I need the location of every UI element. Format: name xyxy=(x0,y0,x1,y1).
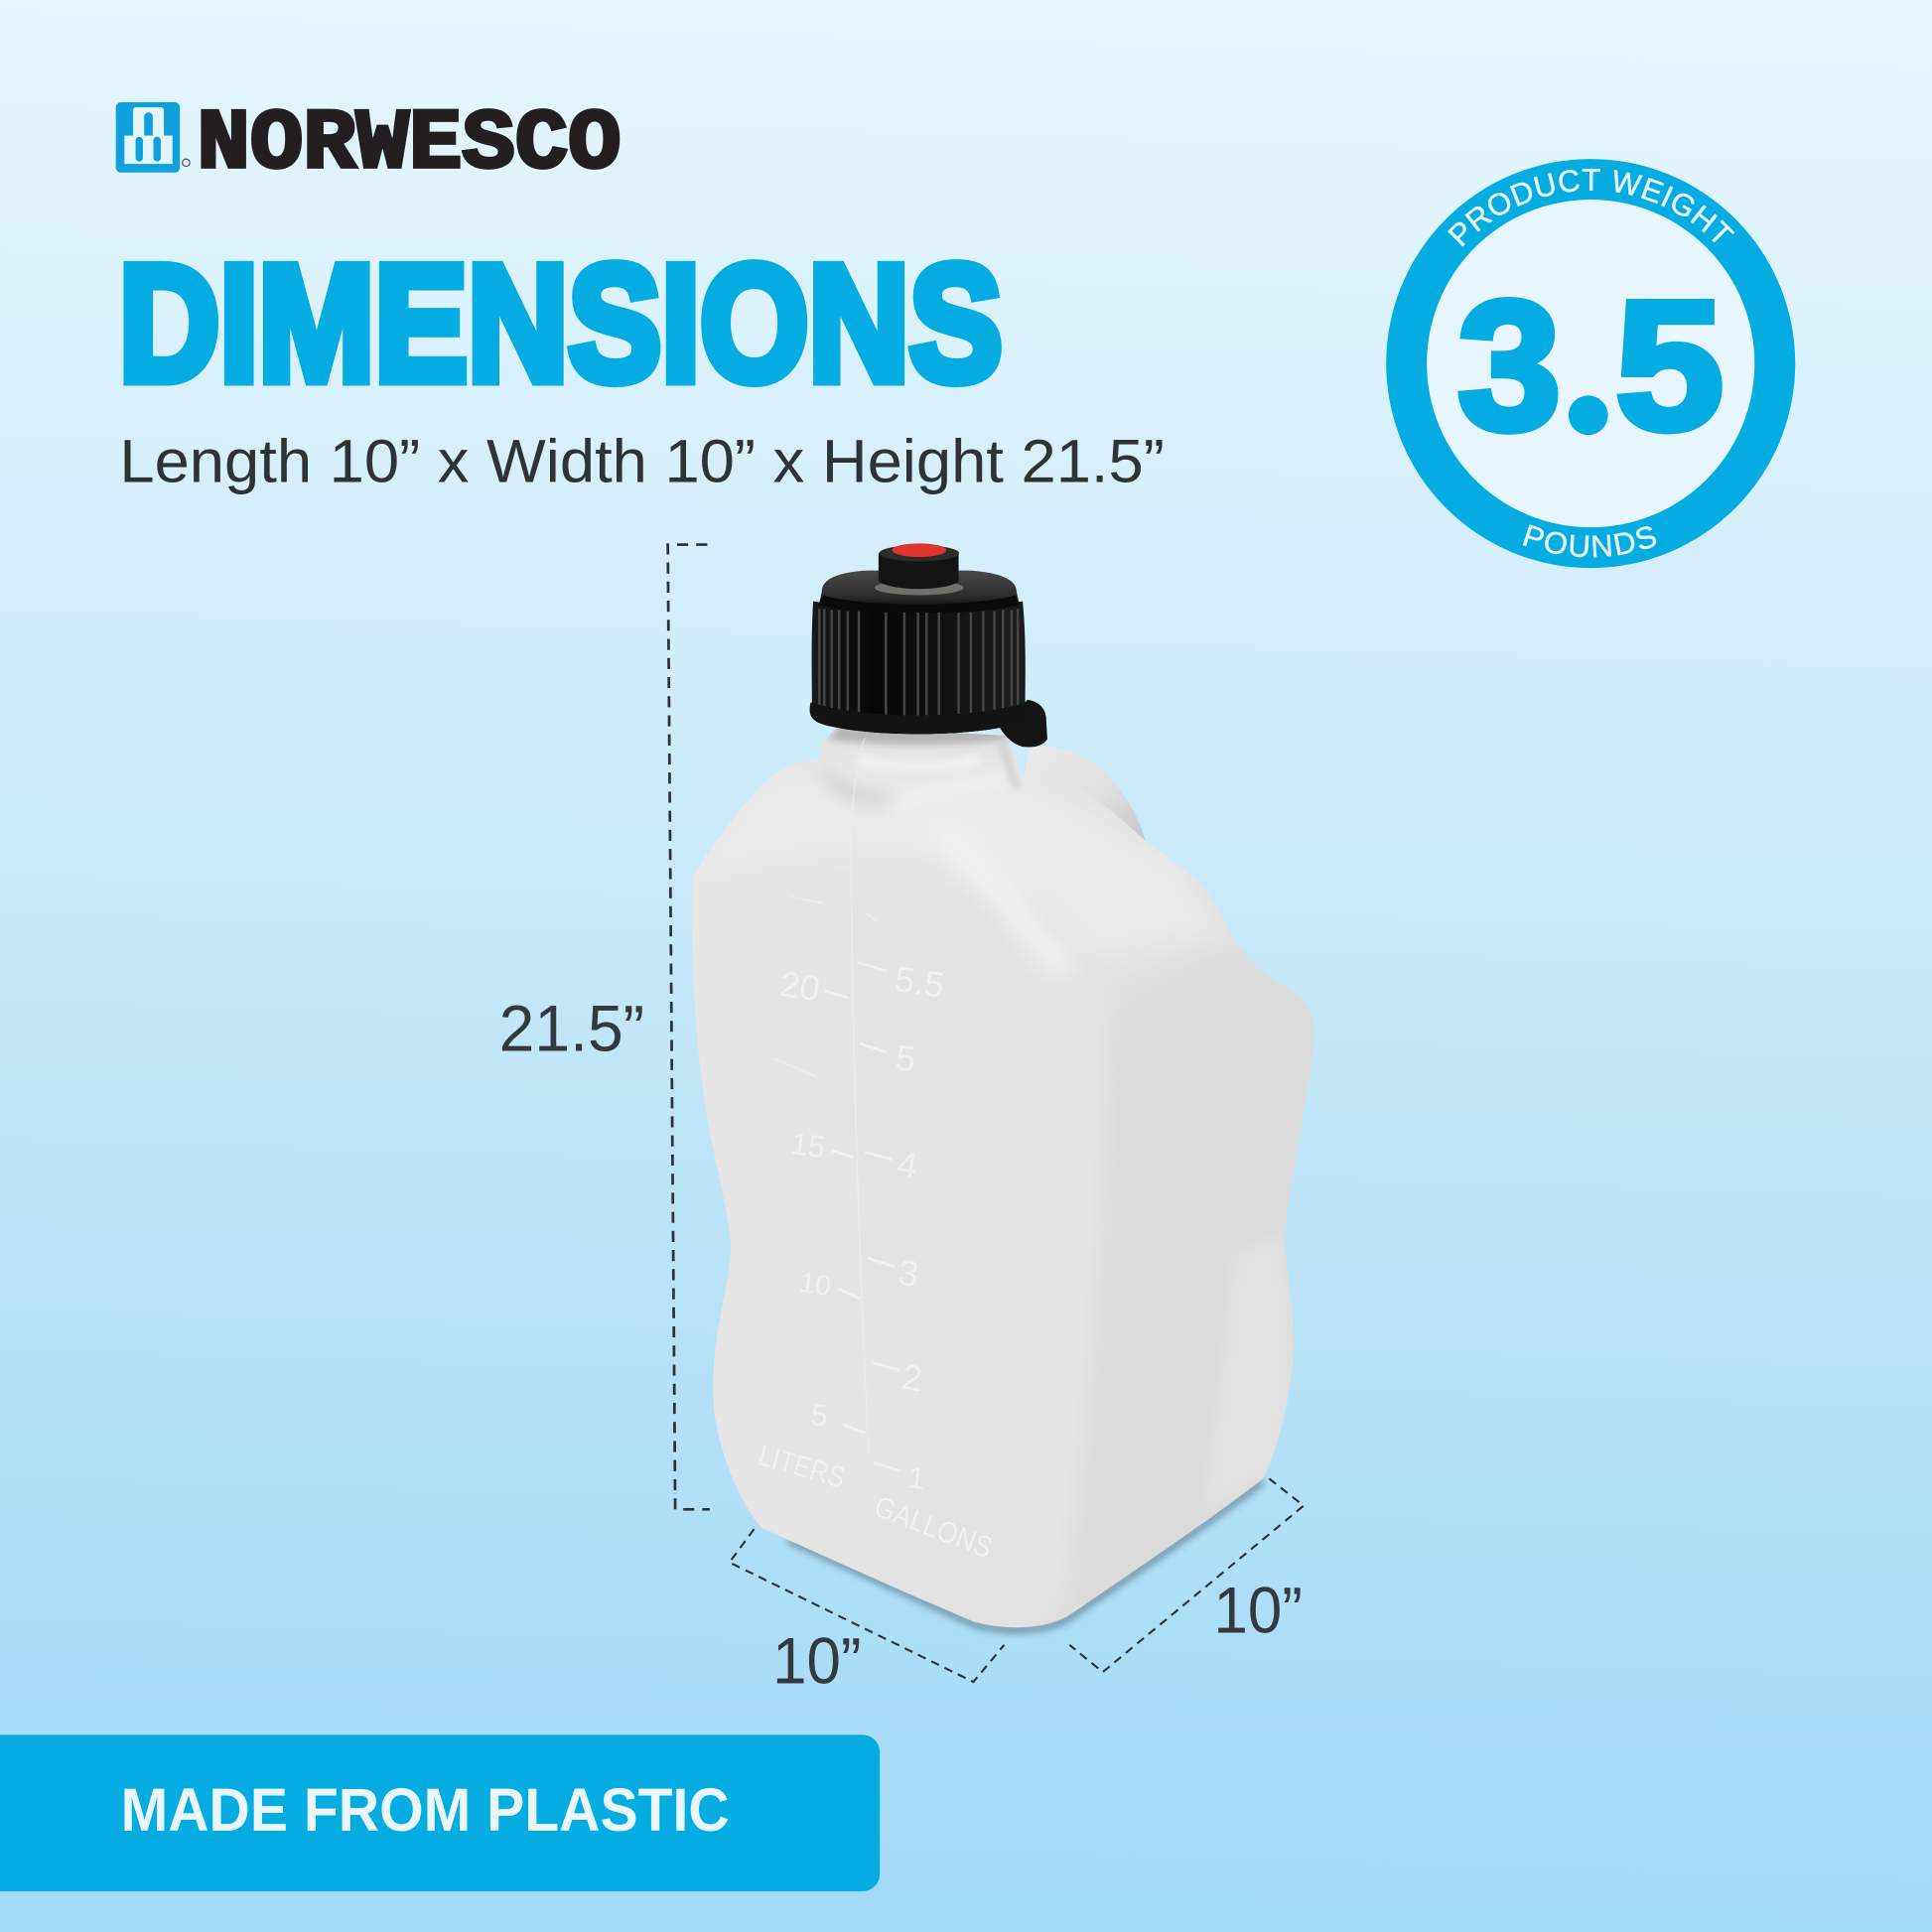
lower-left soft tint xyxy=(790,1541,816,1553)
dimension: height bracket xyxy=(668,545,710,1509)
embossed gauge markings: 20 xyxy=(777,963,823,1009)
vent knob xyxy=(1000,700,1047,748)
label: width 10 left: 10” xyxy=(772,1623,862,1697)
side panel tint xyxy=(1201,1232,1291,1516)
red vent plug xyxy=(893,543,946,557)
dimension: left width bracket xyxy=(730,1529,1004,1682)
cap rim shadow xyxy=(818,595,1021,614)
wordmark: NORWESCO xyxy=(198,96,621,193)
embossed gauge markings: 5 xyxy=(808,1397,830,1434)
title: DIMENSIONS xyxy=(119,231,1003,416)
cap ribbed body xyxy=(811,602,1027,734)
embossed gauge markings: 1 xyxy=(905,1459,927,1496)
jug handle xyxy=(1023,747,1149,863)
top shoulder surface xyxy=(898,789,1209,947)
weight value: 3 xyxy=(1457,264,1561,469)
cap ribs xyxy=(819,609,1018,717)
embossed gauge markings xyxy=(755,958,997,1565)
shoulder highlight xyxy=(891,777,1019,807)
handle crease xyxy=(1017,747,1037,778)
subtitle: dimensions summary: Length 10” x Width 10” x Height 21.5” xyxy=(119,427,1165,494)
faint mould marks xyxy=(788,897,878,1076)
embossed gauge markings: GALLONS xyxy=(870,1490,997,1565)
embossed gauge markings: 10 xyxy=(797,1267,833,1303)
cap top disc xyxy=(818,571,1021,609)
right lower face shade xyxy=(1064,1479,1261,1618)
cap xyxy=(810,543,1028,734)
badge: product weight xyxy=(1386,159,1795,568)
label: height 21.5: 21.5” xyxy=(499,992,644,1065)
cap bottom ring xyxy=(810,702,1028,734)
cap stem xyxy=(879,553,959,589)
banner text: MADE FROM PLASTIC xyxy=(121,1776,730,1845)
embossed gauge markings: 4 xyxy=(895,1143,920,1186)
cap stem base xyxy=(875,581,964,595)
badge bottom label: POUNDS xyxy=(1523,524,1656,558)
mould seam xyxy=(852,738,866,803)
logo: Norwesco xyxy=(116,96,621,193)
embossed gauge markings: 3 xyxy=(896,1252,921,1295)
weight value xyxy=(1457,264,1724,469)
dimension: right width bracket xyxy=(1069,1478,1304,1672)
corner highlight xyxy=(977,874,1070,973)
embossed gauge markings: 15 xyxy=(789,1126,828,1165)
embossed gauge markings: 2 xyxy=(899,1356,925,1399)
icon: Norwesco mark xyxy=(116,102,190,173)
weight value: 5 xyxy=(1615,264,1724,469)
jug ground shadow xyxy=(788,1481,1263,1630)
neck shade xyxy=(824,772,890,808)
jug product illustration xyxy=(678,543,1330,1639)
badge top label: PRODUCT WEIGHT xyxy=(1448,169,1735,246)
jug body xyxy=(678,715,1330,1639)
label: width 10 right: 10” xyxy=(1213,1573,1303,1646)
weight value: . xyxy=(1578,378,1599,447)
embossed gauge markings: 5.5 xyxy=(893,958,947,1006)
embossed gauge markings: LITERS xyxy=(755,1439,849,1495)
banner: made from plastic xyxy=(0,1734,880,1891)
embossed gauge markings: 5 xyxy=(894,1036,917,1079)
